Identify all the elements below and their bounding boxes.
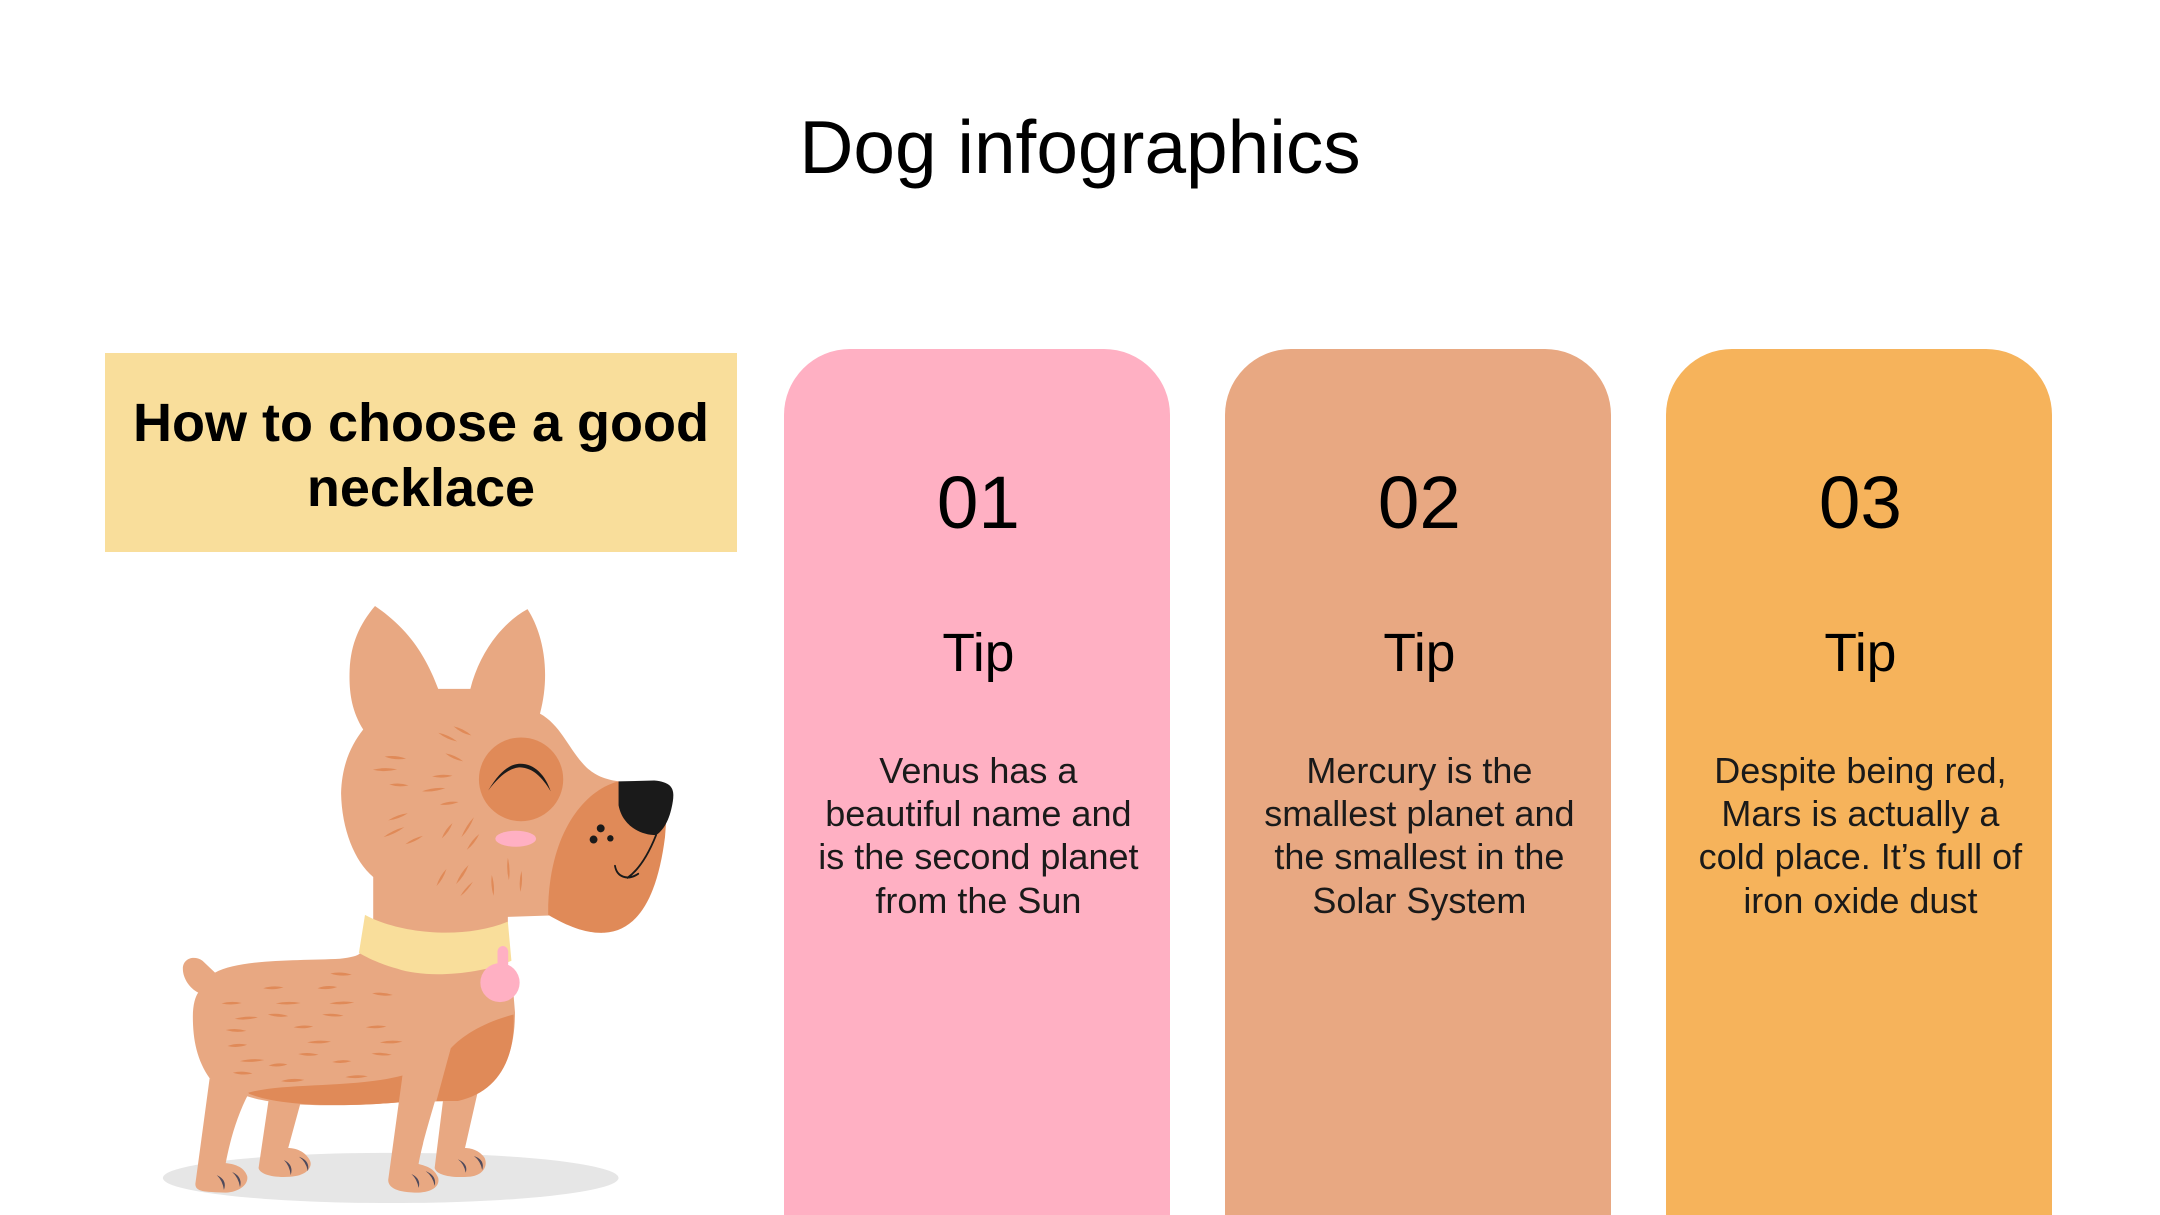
panel: heading banner [105,353,737,552]
tip text 03: iron oxide dust [1743,880,1977,921]
panel: tip 02 [1225,349,1611,1215]
tip text 03 [1699,750,2022,921]
heading: how to choose a good necklace [133,393,709,518]
belly shading [247,1075,402,1105]
tip text 01: from the Sun [875,880,1081,921]
muzzle [548,781,669,933]
tip text 02: the smallest in the [1274,836,1564,877]
tip text 02 [1264,750,1574,921]
whisker dots [590,824,614,844]
heading: how to choose a good necklace: necklace [307,458,535,518]
panel: tip 01 [784,349,1170,1215]
tip text 01: beautiful name and [825,793,1132,834]
body fur marks [221,972,402,1082]
mouth [615,835,656,878]
tip label 02: Tip [1383,624,1455,683]
tip text 03: cold place. It’s full of [1699,836,2022,877]
title: Dog infographics [799,105,1361,189]
tip label 03: Tip [1824,624,1896,683]
number 01: 01 [937,460,1020,544]
cheek blush [495,831,536,847]
near legs [195,1048,451,1193]
nose [619,781,673,835]
chest shading [436,1015,514,1101]
tip text 03: Mars is actually a [1721,793,1999,834]
tip text 02: Mercury is the [1306,750,1532,791]
eye patch [479,737,563,821]
tip text 01 [818,750,1138,921]
collar [359,915,511,974]
far legs [259,1088,486,1177]
dog shadow [163,1153,619,1203]
number 02: 02 [1378,460,1461,544]
tip text 03: Despite being red, [1714,750,2006,791]
panel: tip 03 [1666,349,2052,1215]
collar tag [480,946,520,1002]
number 03: 03 [1819,460,1902,544]
claws [217,1156,483,1190]
tip text 02: smallest planet and [1264,793,1574,834]
heading: how to choose a good necklace: How to choose a good [133,393,709,453]
tip text 02: Solar System [1312,880,1526,921]
dog body [183,954,515,1105]
tip label 01: Tip [942,624,1014,683]
tip text 01: is the second planet [818,836,1138,877]
closed eye [488,764,551,791]
dog head and ears [341,606,619,949]
tip text 01: Venus has a [879,750,1077,791]
head fur marks [373,726,522,896]
